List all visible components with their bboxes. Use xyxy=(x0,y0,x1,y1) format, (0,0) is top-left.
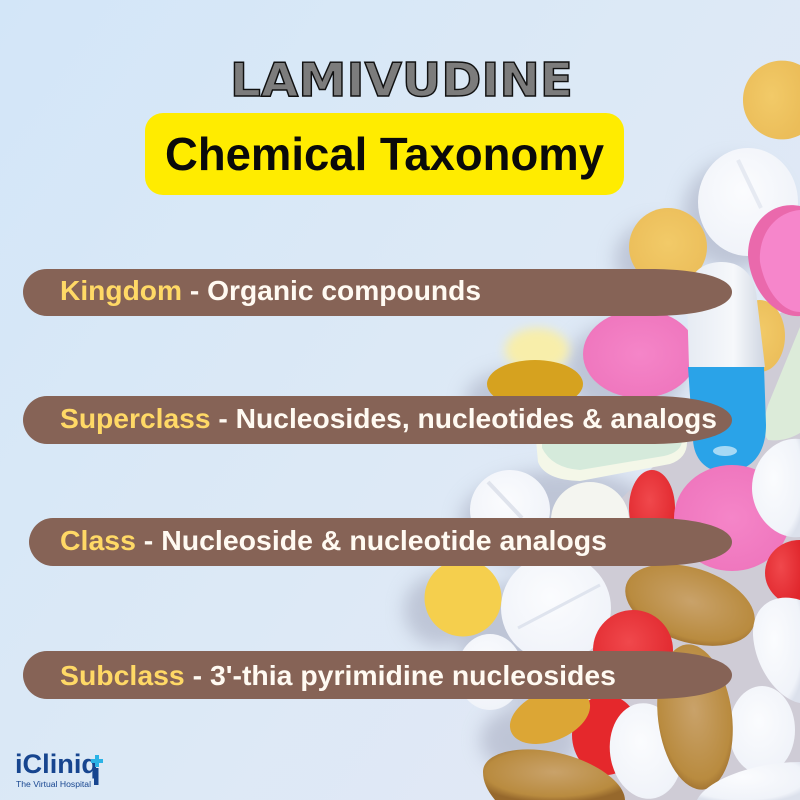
pill shadows xyxy=(404,160,787,775)
pill: mint oblong xyxy=(536,440,687,481)
tablet: white right bottom xyxy=(729,686,795,774)
pill: mint right xyxy=(764,327,800,440)
pile base xyxy=(560,300,800,800)
banner: Class xyxy=(29,518,732,566)
pill: orange xyxy=(629,208,707,286)
banner: Subclass xyxy=(23,651,732,699)
title: LAMIVUDINE xyxy=(230,53,573,107)
pill: red lower xyxy=(572,695,640,775)
pill: top yellow xyxy=(743,61,800,139)
pill: red right xyxy=(765,540,800,606)
Class text: Class - Nucleoside & nucleotide analogs xyxy=(60,525,607,556)
logo wordmark: iCliniq xyxy=(15,749,98,779)
Kingdom text: Kingdom - Organic compounds xyxy=(60,275,481,306)
tablet: white large scored xyxy=(501,554,611,662)
tablet: white centre bottom xyxy=(604,698,688,800)
tablet: cream xyxy=(551,482,629,558)
tablet: white small xyxy=(457,634,523,710)
tablet: white left xyxy=(470,470,550,550)
tablet: white scored xyxy=(698,148,798,256)
pile of pills xyxy=(424,61,800,800)
softgel: amber lower xyxy=(502,677,598,755)
pill: amber softgel xyxy=(487,360,583,408)
softgel: brown bottom xyxy=(483,749,625,800)
softgel: brown right xyxy=(615,549,765,661)
pill: large pink lower xyxy=(674,465,790,571)
capsule: white and blue xyxy=(687,262,766,472)
logo tagline: The Virtual Hospital xyxy=(16,780,91,789)
pill: red round xyxy=(593,610,673,690)
softgel: brown vertical xyxy=(649,640,741,794)
subtitle: Chemical Taxonomy xyxy=(165,128,604,180)
Subclass text: Subclass - 3'-thia pyrimidine nucleosides xyxy=(60,660,616,691)
pill: large pink xyxy=(583,310,697,398)
subtitle badge xyxy=(145,113,624,195)
pill: yellow glow xyxy=(505,328,569,372)
tablet: white bottom right xyxy=(697,762,800,800)
pill: red upper xyxy=(629,470,675,546)
pill: pink right xyxy=(748,205,800,316)
Superclass text: Superclass - Nucleosides, nucleotides & analogs xyxy=(60,403,717,434)
logo: iCliniq xyxy=(15,749,103,789)
tablet: white right lower xyxy=(753,598,800,703)
tablet: white right upper xyxy=(752,439,800,537)
banner: Kingdom xyxy=(23,269,732,316)
pill: orange behind capsule xyxy=(735,300,785,372)
banner: Superclass xyxy=(23,396,732,444)
pill: yellow xyxy=(424,560,502,636)
logo plus icon xyxy=(91,755,103,767)
logo q stem xyxy=(94,768,98,785)
